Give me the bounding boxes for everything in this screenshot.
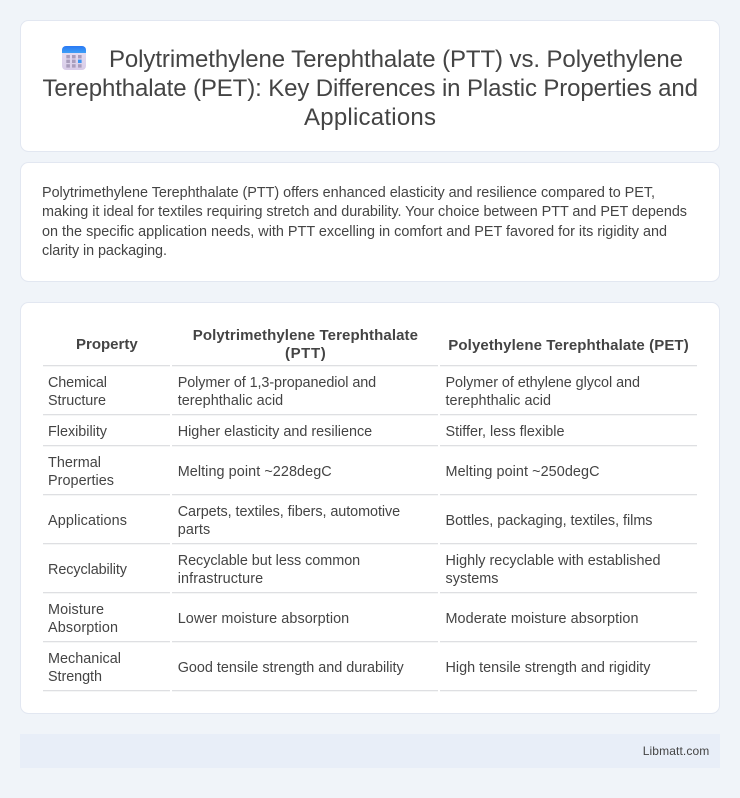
table header: Polytrimethylene Terephthalate [193,327,418,344]
panel: intro paragraph [20,162,720,282]
row: applications [48,504,652,538]
row: applications: parts [178,522,210,538]
row: thermal properties: Melting point ~250degC [446,464,600,480]
row: recyclability: systems [446,571,498,587]
text block: summary: on the specific application needs, with PTT excelling in comfort and PET favored for its rigidity and [42,224,667,240]
row: chemical structure: Chemical [48,375,107,391]
row: recyclability: infrastructure [178,571,263,587]
row: chemical structure: terephthalic acid [178,393,283,409]
row: recyclability: Recyclability [48,562,128,578]
panel: comparison table [20,302,720,714]
table header [76,327,689,362]
row: recyclability: Recyclable but less common [178,553,360,569]
row: recyclability: Highly recyclable with established [446,553,660,569]
row: chemical structure: Polymer of ethylene glycol and [446,375,640,391]
row: thermal properties: Thermal [48,455,101,471]
text block: summary: making it ideal for textiles requiring stretch and durability. Your choice between PTT and PET depends [42,204,687,220]
text block: summary: clarity in packaging. [42,243,167,259]
row: mechanical strength: High tensile strength and rigidity [446,660,651,676]
row: thermal properties: Properties [48,473,114,489]
row: flexibility: Higher elasticity and resilience [178,424,372,440]
row: recyclability [48,553,660,587]
row: thermal properties [48,455,600,489]
title: Polytrimethylene Terephthalate (PTT) vs. Polyethylene [109,46,683,73]
text block: summary: Polytrimethylene Terephthalate (PTT) offers enhanced elasticity and resilience compared to PET, [42,185,655,201]
row: chemical structure: Structure [48,393,106,409]
text block: summary [42,185,687,259]
row: flexibility: Flexibility [48,424,108,440]
title: Terephthalate (PET): Key Differences in Plastic Properties and [42,75,698,102]
row: moisture absorption: Moisture [48,602,104,618]
footer [20,734,720,768]
row: mechanical strength [48,651,651,685]
row: applications: Carpets, textiles, fibers, automotive [178,504,400,520]
row: chemical structure: terephthalic acid [446,393,551,409]
row: chemical structure [48,375,640,409]
row: chemical structure: Polymer of 1,3-propanediol and [178,375,376,391]
row: moisture absorption: Lower moisture absorption [178,611,349,627]
table header: Polyethylene Terephthalate (PET) [448,337,689,354]
row: flexibility: Stiffer, less flexible [446,424,564,440]
footer: Libmatt.com [643,744,709,758]
icon: calendar [62,46,86,70]
row: applications: Applications [48,513,127,529]
row: mechanical strength: Good tensile strength and durability [178,660,404,676]
table header: (PTT) [285,345,326,362]
row: mechanical strength: Strength [48,669,102,685]
row: flexibility [48,424,564,440]
row: moisture absorption: Moderate moisture absorption [446,611,638,627]
title: Applications [304,104,436,131]
row: thermal properties: Melting point ~228degC [178,464,332,480]
title [42,46,698,131]
row: moisture absorption [48,602,638,636]
table header: Property [76,336,138,353]
row: applications: Bottles, packaging, textiles, films [446,513,652,529]
row: moisture absorption: Absorption [48,620,118,636]
row: mechanical strength: Mechanical [48,651,121,667]
panel: title card [20,20,720,152]
